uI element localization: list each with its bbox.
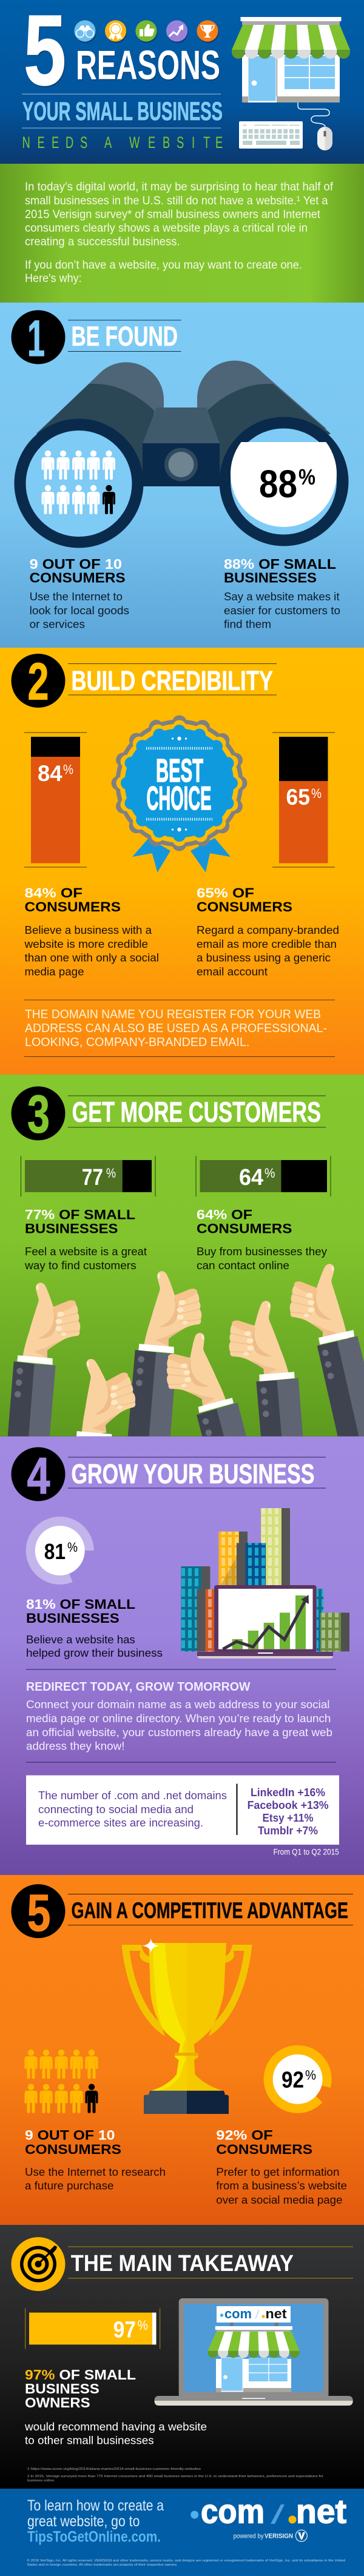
stat text: 81 percent of small businesses: Believe a website has xyxy=(26,1633,135,1646)
stat text: 9 out of 10 consumers: 9 OUT OF 10 xyxy=(30,556,122,572)
panel: the main takeaway xyxy=(0,2225,364,2489)
call to action: To learn how to create a xyxy=(27,2497,164,2514)
stat: 88 percent: 88 xyxy=(259,462,297,506)
sign: com net: com xyxy=(224,2306,252,2321)
stat text: 84 percent of consumers: 84% OF xyxy=(24,885,83,901)
best choice badge: BEST xyxy=(156,753,203,789)
footnotes xyxy=(27,2467,323,2483)
icon: award ribbon xyxy=(105,20,127,43)
people pictogram 9 of 10 xyxy=(24,2050,98,2113)
stat text: 92 percent of consumers: over a social media page xyxy=(216,2193,342,2206)
text block: redirect today xyxy=(26,1680,332,1753)
stat text: 9 out of 10 consumers: a future purchase xyxy=(25,2179,114,2192)
stat text: 65 percent of consumers: a business using a generic xyxy=(197,952,331,964)
bar chart: 65 percent: 65 xyxy=(286,785,310,810)
list: social growth figures: Tumblr +7% xyxy=(258,1824,318,1837)
stat text: 88 percent of small businesses: Say a website makes it xyxy=(224,591,340,603)
text block: intro copy: small businesses in the U.S. still do not have a website.¹ Yet a xyxy=(25,194,328,207)
icon: rising arrow xyxy=(166,20,188,43)
icon: trophy xyxy=(197,20,219,43)
illustration: laptop storefront xyxy=(154,2298,353,2406)
stat text: 9 out of 10 consumers xyxy=(25,2128,166,2192)
list: social growth figures: Facebook +13% xyxy=(248,1799,329,1811)
hand 2 xyxy=(128,1271,201,1437)
stat text: 9 out of 10 consumers: Use the Internet to xyxy=(30,591,123,603)
sparkle xyxy=(142,1938,160,1953)
footnotes: 1 https://www.score.org/blog/2014/aliana-marino/2014-small-business-customer-friendly-websites xyxy=(27,2467,201,2471)
stat text: 65 percent of consumers xyxy=(197,885,339,978)
stat text: 64 percent of consumers: Buy from businesses they xyxy=(197,1245,328,1258)
panel: 2 build credibility xyxy=(0,649,364,1075)
icon: binoculars xyxy=(74,20,96,43)
icon: keyboard xyxy=(239,121,303,149)
left lens xyxy=(15,418,143,548)
donut chart: 81 percent xyxy=(22,1512,98,1589)
list: social growth figures xyxy=(248,1786,329,1837)
stat text: 9 out of 10 consumers: 9 OUT OF 10 xyxy=(25,2128,115,2143)
number badge 2: 2 xyxy=(28,652,49,711)
callout: domains connecting to social xyxy=(26,1776,339,1845)
callout: domain name email: THE DOMAIN NAME YOU REGISTER FOR YOUR WEB xyxy=(25,1008,321,1021)
stat text: 88 percent of small businesses: 88% OF SMALL xyxy=(224,556,336,572)
number badge 5 xyxy=(11,1884,66,1942)
people pictogram 9 of 10 xyxy=(41,451,115,514)
stat text: 77 percent of small businesses: Feel a website is a great xyxy=(25,1245,147,1258)
donut chart: 92 percent xyxy=(256,2038,339,2121)
bar chart: 64 percent: 64 xyxy=(239,1165,263,1190)
stat text: 64 percent of consumers: 64% OF xyxy=(197,1207,252,1223)
logo: powered by verisign xyxy=(234,2530,307,2541)
stat text: 9 out of 10 consumers: look for local goods xyxy=(30,605,129,617)
text block: intro copy: In today’s digital world, it may be surprising to hear that half of xyxy=(25,180,334,193)
number badge 3 xyxy=(11,1084,66,1144)
chart bars xyxy=(232,1595,306,1649)
bridge xyxy=(143,408,220,443)
icon: thumbs up xyxy=(135,20,158,43)
bar chart: 84 percent: % xyxy=(63,762,73,777)
text block: intro copy: If you don’t have a website, you may want to create one. xyxy=(25,258,302,272)
stat text: 97 percent of small business owners xyxy=(24,2367,207,2447)
stat text: 81 percent of small businesses: helped grow their business xyxy=(26,1646,163,1659)
number badge 4: 4 xyxy=(27,1447,50,1505)
stat text: 84 percent of consumers: than one with only a social xyxy=(24,952,159,964)
text block: redirect today: Connect your domain name as a web address to your social xyxy=(26,1698,330,1711)
donut chart: 81 percent: % xyxy=(67,1540,78,1555)
right lens xyxy=(220,417,348,546)
call to action: great website, go to xyxy=(27,2513,140,2530)
text block: redirect today: an official website, your customers already have a great web xyxy=(26,1726,332,1739)
illustration: storefront computer xyxy=(232,17,350,150)
trend arrow xyxy=(223,1595,309,1649)
stat text: 97 percent of small business owners: to other small businesses xyxy=(25,2434,154,2447)
bar chart: 84 percent: 84 xyxy=(38,761,62,786)
icon: cable xyxy=(298,102,329,127)
stat text: 88 percent of small businesses xyxy=(224,556,340,631)
illustration: thumbs up hands xyxy=(8,1264,364,1437)
bar chart: 97 percent: % xyxy=(137,2318,148,2333)
panel: 3 get more customers xyxy=(0,1075,364,1437)
stat text: 92 percent of consumers: Prefer to get information xyxy=(216,2165,340,2178)
stat text: 97 percent of small business owners: would recommend having a website xyxy=(24,2420,207,2433)
stat text: 77 percent of small businesses: 77% OF SMALL xyxy=(25,1207,135,1223)
text block: intro copy: creating a successful business. xyxy=(25,235,180,249)
stat text: 65 percent of consumers: email as more credible than xyxy=(197,938,337,950)
callout: domains connecting to social: connecting to social media and xyxy=(38,1803,194,1816)
bar chart: 64 percent: % xyxy=(265,1166,275,1181)
illustration: trophy xyxy=(121,1938,252,2114)
hand 4 xyxy=(161,1330,246,1437)
stat text: 64 percent of consumers: can contact online xyxy=(197,1259,289,1272)
stat text: 88 percent of small businesses: BUSINESSES xyxy=(224,570,317,586)
stat text: 77 percent of small businesses: BUSINESSES xyxy=(25,1221,118,1236)
stat text: 64 percent of consumers: CONSUMERS xyxy=(197,1221,292,1236)
stat text: 84 percent of consumers: media page xyxy=(24,965,84,978)
title: reasons front: REASONS xyxy=(76,42,220,89)
callout: domains connecting to social: e-commerce sites are increasing. xyxy=(38,1816,203,1829)
heading: the main takeaway: THE MAIN TAKEAWAY xyxy=(71,2251,294,2276)
logo: com net xyxy=(190,2492,346,2530)
laptop xyxy=(197,1585,333,1659)
panel: 5 gain a competitive advantage xyxy=(0,1875,364,2225)
bar chart: 84 percent xyxy=(24,733,87,867)
donut chart: 81 percent: 81 xyxy=(44,1539,66,1564)
stat: 88 percent: % xyxy=(298,465,315,489)
heading: build credibility: BUILD CREDIBILITY xyxy=(72,665,273,696)
number badge 3: 3 xyxy=(27,1084,50,1144)
stat text: 9 out of 10 consumers: CONSUMERS xyxy=(25,2142,121,2157)
copyright xyxy=(27,2558,345,2567)
hand 1 xyxy=(8,1283,80,1437)
text block: redirect today: address they know! xyxy=(26,1739,125,1753)
source note: From Q1 to Q2 2015 xyxy=(273,1848,339,1857)
stat text: 84 percent of consumers: website is more credible xyxy=(24,938,148,950)
title: your small business: YOUR SMALL BUSINESS xyxy=(22,97,223,126)
stat text: 77 percent of small businesses: way to find customers xyxy=(24,1259,136,1272)
logo: com net: net xyxy=(296,2492,346,2530)
hand 3 xyxy=(73,1354,139,1437)
panel: 1 be found xyxy=(0,303,364,649)
stat text: 65 percent of consumers: 65% OF xyxy=(197,885,254,901)
panel: 4 grow your business xyxy=(0,1437,364,1875)
icon: target with dart xyxy=(11,2237,66,2291)
number badge 1: 1 xyxy=(27,310,45,367)
stat text: 84 percent of consumers: Believe a business with a xyxy=(24,924,152,936)
text block: intro copy: Here's why: xyxy=(25,272,82,285)
logo: powered by verisign: powered by xyxy=(234,2532,264,2540)
donut chart: 92 percent: 92 xyxy=(281,2068,304,2093)
illustration: city skyline with laptop chart xyxy=(181,1508,349,1659)
text block: redirect today: REDIRECT TODAY, GROW TOMORROW xyxy=(26,1680,251,1694)
hand 5 xyxy=(226,1300,303,1437)
list: social growth figures: LinkedIn +16% xyxy=(251,1786,325,1799)
stat text: 81 percent of small businesses: BUSINESSES xyxy=(26,1611,120,1626)
text block: intro copy xyxy=(25,180,334,285)
icon: mouse xyxy=(317,127,332,150)
stat text: 92 percent of consumers: CONSUMERS xyxy=(216,2142,312,2157)
stat text: 9 out of 10 consumers: Use the Internet to research xyxy=(25,2165,166,2178)
stat text: 92 percent of consumers xyxy=(216,2128,347,2206)
number badge 4 xyxy=(11,1447,66,1505)
number badge 1 xyxy=(11,310,66,367)
stat text: 97 percent of small business owners: OWNERS xyxy=(25,2395,90,2410)
stat text: 88 percent of small businesses: easier for customers to xyxy=(224,605,340,617)
call to action: TipsToGetOnline.com. xyxy=(27,2529,161,2546)
copyright: © 2016 VeriSign, Inc. All rights reserved. VERISIGN and other trademarks, service marks, and designs are registered or unregistered trademarks of VeriSign, Inc. and its subsidiaries in the United xyxy=(27,2558,345,2563)
stat text: 84 percent of consumers: CONSUMERS xyxy=(24,899,121,914)
sign: com net: net xyxy=(266,2306,287,2321)
bar chart: 77 percent: 77 xyxy=(82,1165,103,1190)
logo: com net: com xyxy=(201,2492,265,2530)
hand 6 xyxy=(290,1264,364,1437)
best choice badge: CHOICE xyxy=(147,779,211,817)
text block: intro copy: 2015 Verisign survey* of small business owners and Internet xyxy=(25,207,321,221)
stat text: 9 out of 10 consumers: CONSUMERS xyxy=(30,570,126,586)
stat text: 77 percent of small businesses xyxy=(24,1207,147,1272)
bar chart: 65 percent xyxy=(272,733,335,867)
binoculars illustration xyxy=(15,361,348,548)
text block: redirect today: media page or online directory. When you’re ready to launch xyxy=(26,1712,331,1725)
callout: domain name email: LOOKING, COMPANY-BRANDED EMAIL. xyxy=(25,1036,249,1049)
stat text: 92 percent of consumers: from a business’s website xyxy=(216,2179,347,2192)
stat text: 88 percent of small businesses: find them xyxy=(224,619,271,631)
heading: be found: BE FOUND xyxy=(72,321,178,352)
number badge 5: 5 xyxy=(27,1884,51,1942)
stat text: 65 percent of consumers: Regard a company-branded xyxy=(197,924,339,936)
stat text: 97 percent of small business owners: BUSINESS xyxy=(25,2381,99,2397)
stat text: 9 out of 10 consumers: or services xyxy=(30,619,85,631)
stat text: 9 out of 10 consumers xyxy=(30,556,129,631)
best choice badge xyxy=(115,719,243,873)
stat text: 65 percent of consumers: CONSUMERS xyxy=(197,899,292,914)
sign: com net xyxy=(217,2306,291,2323)
sign: com net: / xyxy=(255,2309,260,2322)
text block: intro copy: consumers clearly shows a website plays a critical role in xyxy=(25,221,308,235)
bar chart: 65 percent: % xyxy=(311,786,322,801)
callout: domain name email: ADDRESS CAN ALSO BE USED AS A PROFESSIONAL- xyxy=(25,1022,327,1035)
bar chart: 64 percent xyxy=(195,1156,331,1196)
title: reasons: REASONS xyxy=(76,43,221,89)
donut chart: 92 percent: % xyxy=(305,2068,316,2082)
bar chart: 77 percent: % xyxy=(106,1166,116,1181)
bar chart: 97 percent: 97 xyxy=(113,2318,136,2343)
call to action xyxy=(27,2497,164,2546)
stat text: 81 percent of small businesses xyxy=(26,1597,163,1659)
list: social growth figures: Etsy +11% xyxy=(262,1811,313,1824)
title: your small business shadow: YOUR SMALL BUSINESS xyxy=(23,98,223,127)
bar chart: 77 percent xyxy=(21,1156,155,1196)
bar chart: 97 percent xyxy=(25,2308,160,2349)
panel: footer xyxy=(0,2489,364,2576)
stat text: 84 percent of consumers xyxy=(24,885,159,978)
footnotes: 2 In 2015, Verisign surveyed more than 775 Internet consumers and 450 small business owners in the U.S. to understand their behaviors, preferences and expectations for xyxy=(27,2475,323,2478)
footnotes: business online. xyxy=(27,2479,55,2483)
logo: powered by verisign: VERISIGN xyxy=(265,2532,293,2540)
title: needs a website: NEEDS A WEBSITE xyxy=(22,133,223,152)
stat text: 81 percent of small businesses: 81% OF SMALL xyxy=(26,1597,135,1612)
callout: domain name email xyxy=(25,1008,327,1049)
trophy base xyxy=(144,2091,229,2114)
panel: header xyxy=(0,0,364,164)
number badge 2 xyxy=(11,652,66,711)
stat text: 64 percent of consumers xyxy=(197,1207,328,1272)
callout: domains connecting to social: The number of .com and .net domains xyxy=(38,1789,227,1802)
panel: introduction xyxy=(0,164,364,303)
copyright: States and in foreign countries. All other trademarks are property of their respective owners. xyxy=(27,2563,178,2567)
stat text: 65 percent of consumers: email account xyxy=(197,965,268,978)
stat text: 97 percent of small business owners: 97% OF SMALL xyxy=(25,2367,136,2383)
stat text: 92 percent of consumers: 92% OF xyxy=(216,2128,273,2143)
